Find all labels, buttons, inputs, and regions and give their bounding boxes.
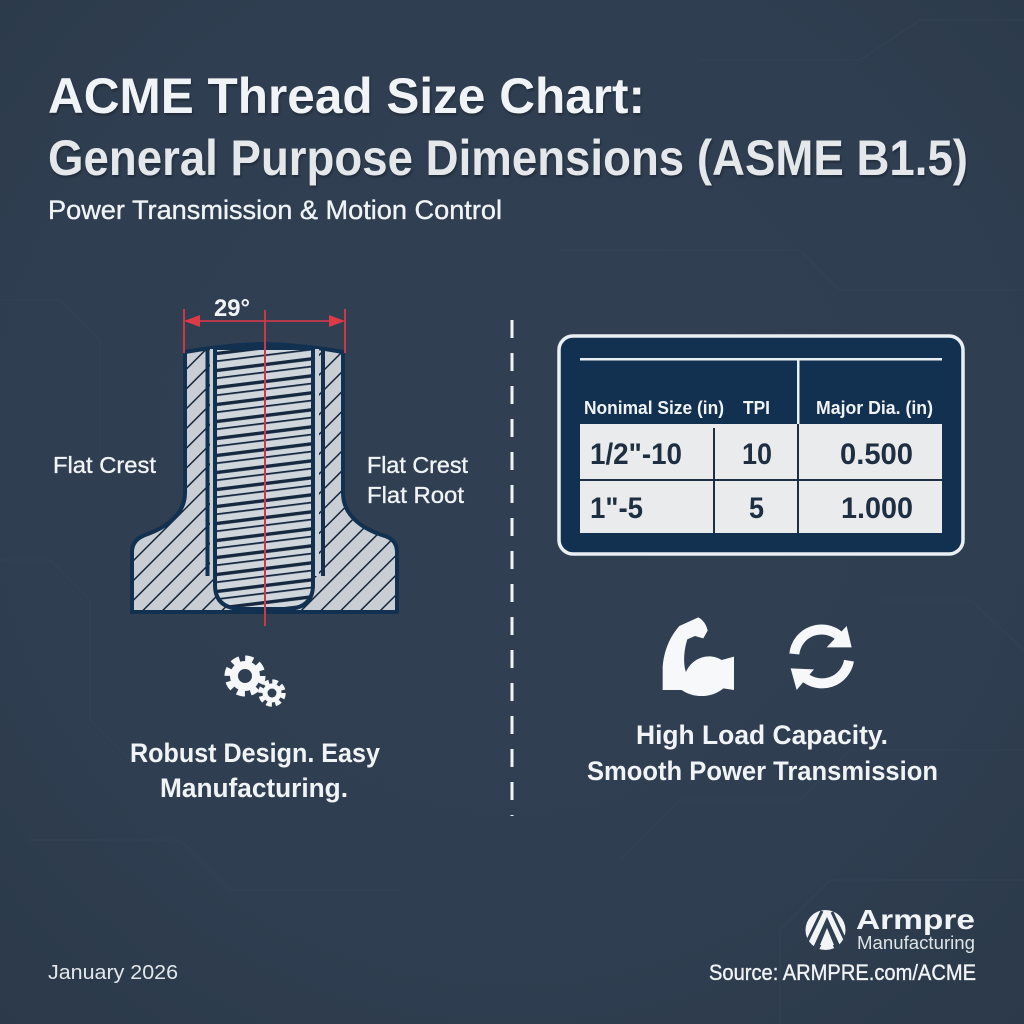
threaded core — [215, 348, 313, 609]
inner wall lines — [206, 349, 325, 576]
title — [48, 68, 968, 186]
icon: gears — [228, 658, 284, 704]
subtitle: Power Transmission & Motion Control — [48, 195, 502, 225]
table rows — [580, 424, 942, 533]
logo: Armpre Manufacturing — [806, 904, 975, 953]
logo: Armpre Manufacturing: Manufacturing — [857, 933, 975, 953]
table header — [584, 398, 933, 418]
title: ACME Thread Size Chart: — [48, 68, 645, 124]
angle label: 29° — [214, 295, 250, 322]
dimension arrow: 29 degrees — [184, 309, 345, 353]
caption: robust design: Robust Design. Easy — [130, 738, 380, 768]
thread body with hatching — [132, 344, 397, 612]
label: right flat crest and root: Flat Root — [367, 482, 465, 508]
panel: thread cross-section diagram — [132, 295, 397, 626]
table rows: 10 — [742, 438, 772, 471]
date: January 2026 — [48, 962, 178, 984]
table header: Major Dia. (in) — [816, 398, 933, 418]
table header: TPI — [743, 398, 770, 418]
icon: flexed bicep — [663, 617, 734, 696]
caption: robust design — [130, 738, 380, 803]
table rows: 1/2"-10 — [590, 438, 682, 471]
panel: thread size table — [559, 336, 963, 554]
center line — [264, 310, 266, 626]
caption: load capacity: High Load Capacity. — [636, 720, 888, 750]
caption: load capacity: Smooth Power Transmission — [587, 756, 938, 786]
table header: Nonimal Size (in) — [584, 398, 724, 418]
caption: load capacity — [587, 720, 938, 786]
caption: robust design: Manufacturing. — [160, 773, 348, 803]
table rows: 1.000 — [841, 492, 913, 525]
table rows: 1"-5 — [590, 492, 643, 525]
label: right flat crest and root: Flat Crest — [367, 452, 469, 478]
label: right flat crest and root — [367, 452, 469, 508]
logo: Armpre Manufacturing: Armpre — [856, 904, 975, 935]
label: left flat crest: Flat Crest — [53, 452, 157, 478]
source line: Source: ARMPRE.com/ACME — [709, 960, 976, 985]
icon: refresh arrows — [791, 626, 852, 690]
table rows: 0.500 — [840, 438, 913, 471]
table rows: 5 — [749, 492, 764, 525]
icon: logo mark — [806, 910, 846, 950]
